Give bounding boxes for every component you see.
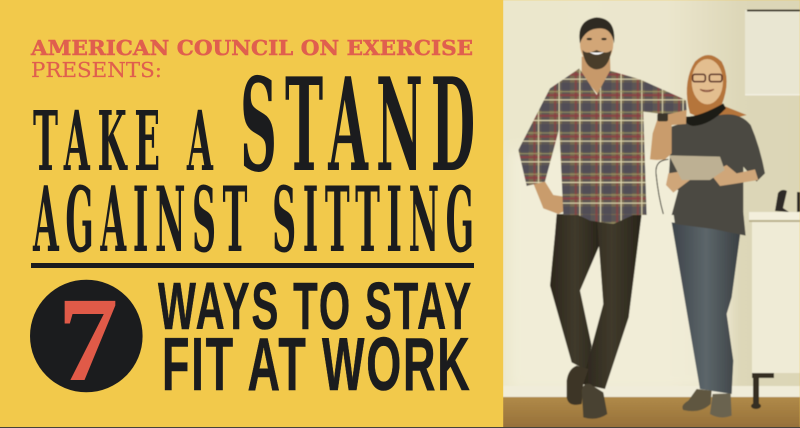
subtitle: 7 ways to stay fit at work: FIT AT WORK: [162, 323, 470, 407]
beard: [582, 50, 612, 69]
watch: [657, 113, 668, 121]
subtitle: 7 ways to stay fit at work: WAYS TO STAY: [158, 268, 471, 344]
whiteboard: [745, 10, 800, 96]
title: Take a Stand Against Sitting: TAKE A: [33, 93, 214, 190]
bright lower wall: [510, 150, 730, 390]
bottom edge line: [0, 427, 800, 428]
wooden floor: [503, 397, 800, 428]
glasses: [693, 74, 722, 82]
neck: [582, 57, 611, 95]
baseboard: [503, 386, 800, 397]
title: Take a Stand Against Sitting: AGAINST SITTING: [33, 167, 474, 274]
forearm and hand on shoulder: [650, 110, 687, 160]
badge: number 7: 7: [58, 273, 118, 407]
woman: upper body, hair, tablet: [656, 55, 765, 215]
man: shirt tail: [573, 212, 639, 224]
hair: [579, 17, 614, 43]
hand on hip: [533, 182, 575, 214]
woman: sweater hem: [673, 212, 746, 236]
heading: American Council on Exercise presents: PRESENTS:: [31, 58, 162, 82]
head: [580, 21, 613, 66]
forearm and hand: [710, 165, 758, 186]
title: Take a Stand Against Sitting: [33, 49, 475, 274]
man: upper body: [518, 17, 687, 215]
headphones: [686, 103, 726, 126]
wall: [503, 0, 800, 397]
woman: jeans and boots: [672, 212, 746, 417]
plaid shirt: [518, 68, 687, 215]
face: [692, 59, 723, 104]
subtitle: 7 ways to stay fit at work: [158, 268, 471, 407]
heading: American Council on Exercise presents: [30, 36, 473, 82]
divider rule: [31, 263, 474, 268]
smile: [589, 52, 604, 55]
tablet: [669, 155, 725, 180]
cable: [656, 159, 668, 214]
smile: [700, 89, 714, 92]
yellow background panel: [0, 0, 503, 428]
heading: American Council on Exercise presents: AMERICAN COUNCIL ON EXERCISE: [30, 36, 473, 60]
eyes: [587, 38, 592, 40]
man: trousers and shoes: [550, 212, 642, 419]
desk phone and counter cabinet: [749, 190, 800, 409]
yellow edge strip: [500, 0, 503, 428]
hair: [687, 55, 747, 123]
sweater: [668, 114, 765, 215]
badge: number 7: [30, 273, 143, 407]
photo: two colleagues standing against a wall: [503, 0, 800, 428]
title: Take a Stand Against Sitting: STAND: [240, 49, 475, 200]
